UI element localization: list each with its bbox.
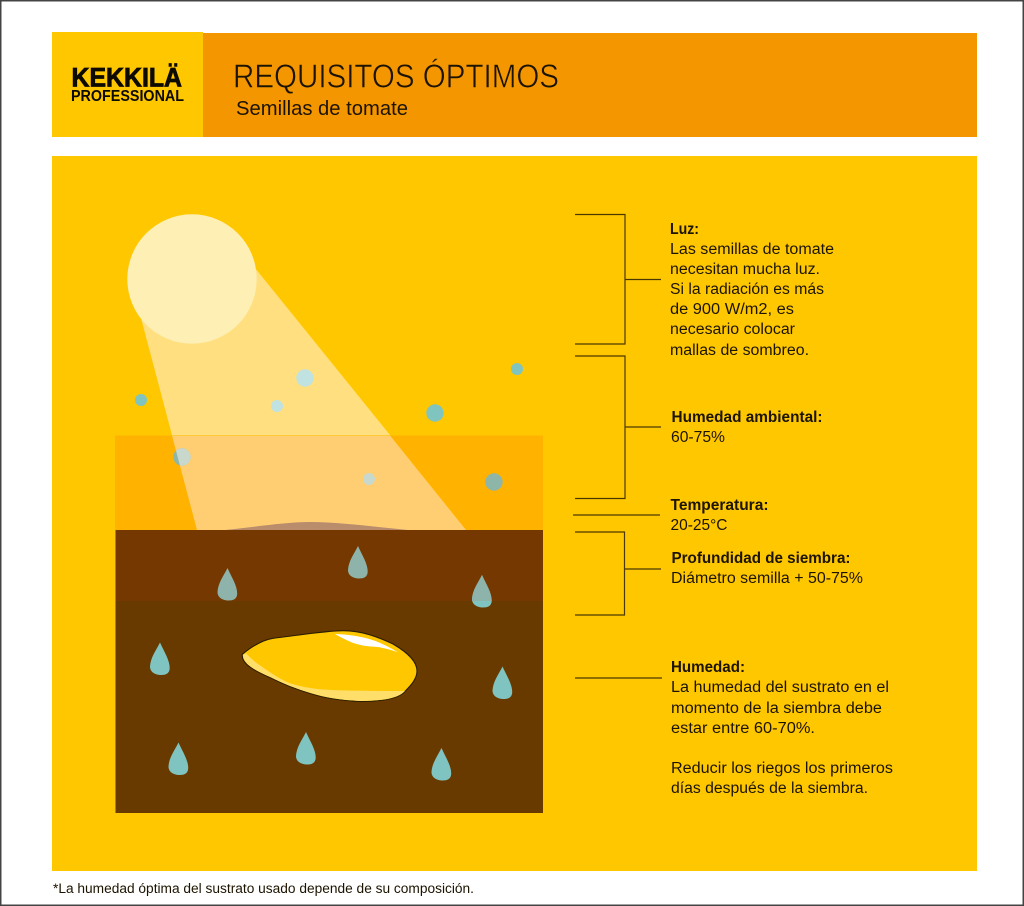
text: humedad: días después de la siembra.	[671, 780, 868, 797]
text: humedad: estar entre 60-70%.	[671, 720, 815, 737]
light beam lower	[172, 436, 466, 530]
text: luz: necesitan mucha luz.	[670, 261, 820, 278]
bracket: luz	[575, 214, 661, 344]
seed	[242, 631, 417, 702]
upper substrate	[116, 530, 543, 601]
logo block: PROFESSIONAL	[71, 88, 184, 105]
line: humedad	[575, 677, 662, 679]
text: profundidad de siembra	[671, 550, 863, 587]
subtitle: Semillas de tomate	[236, 98, 408, 120]
text: luz: necesario colocar	[670, 321, 795, 338]
text: humedad ambiental: 60-75%	[671, 429, 725, 446]
line: temperatura	[573, 514, 660, 516]
main panel	[52, 156, 977, 871]
soil mound	[225, 522, 408, 530]
header title band	[203, 33, 977, 137]
text: luz: Luz:	[670, 221, 699, 238]
text: humedad ambiental	[671, 409, 822, 446]
sun	[127, 214, 257, 344]
header	[52, 32, 977, 137]
logo block	[52, 32, 203, 137]
text: temperatura: 20-25°C	[670, 517, 728, 534]
text: profundidad de siembra: Diámetro semilla + 50-75%	[671, 570, 863, 587]
text: luz: Las semillas de tomate	[670, 241, 834, 258]
bracket: profundidad de siembra	[575, 532, 661, 615]
footnote: *La humedad óptima del sustrato usado depende de su composición.	[53, 881, 474, 896]
text: humedad ambiental: Humedad ambiental:	[672, 409, 822, 426]
text: temperatura	[670, 497, 768, 534]
text: humedad: momento de la siembra debe	[671, 700, 882, 717]
air band	[115, 436, 543, 530]
title: REQUISITOS ÓPTIMOS	[233, 58, 559, 94]
illustration: germination scene	[115, 214, 543, 813]
text: luz	[670, 221, 834, 359]
text: profundidad de siembra: Profundidad de siembra:	[672, 550, 850, 567]
text: humedad: Humedad:	[671, 659, 745, 676]
lower substrate	[116, 601, 543, 813]
bracket: humedad ambiental	[575, 356, 661, 498]
logo block: KEKKILÄ	[72, 62, 182, 92]
humidity particles	[135, 363, 523, 491]
text: luz: mallas de sombreo.	[670, 342, 809, 359]
text: humedad: Reducir los riegos los primeros	[671, 760, 893, 777]
light beam upper	[142, 268, 390, 435]
text: humedad: La humedad del sustrato en el	[671, 679, 889, 696]
text: temperatura: Temperatura:	[670, 497, 768, 514]
text: luz: de 900 W/m2, es	[670, 301, 794, 318]
text: luz: Si la radiación es más	[670, 281, 824, 298]
text: humedad	[671, 659, 893, 797]
water drops	[150, 546, 512, 780]
